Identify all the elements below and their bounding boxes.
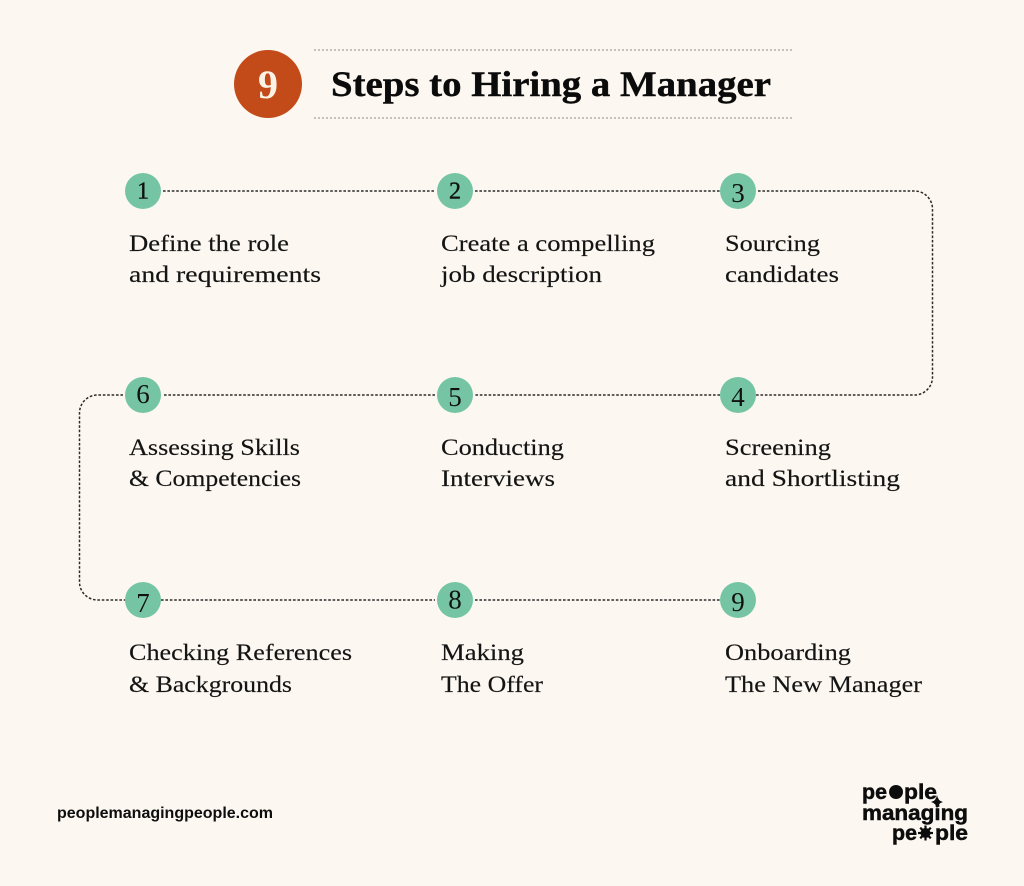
step 8: Making bbox=[441, 640, 524, 666]
website url: peoplemanagingpeople.com bbox=[57, 805, 273, 822]
step 5: Interviews bbox=[441, 466, 555, 492]
step 7: 7 bbox=[136, 588, 150, 618]
step 2: Create a compelling bbox=[441, 231, 655, 257]
step 9: 9 bbox=[731, 587, 745, 617]
step 4: 4 bbox=[731, 382, 745, 412]
step 8: The Offer bbox=[441, 672, 543, 698]
title block bbox=[234, 50, 792, 118]
step 7 bbox=[125, 582, 352, 698]
step 1: Define the role bbox=[129, 231, 289, 257]
step 9: Onboarding bbox=[725, 640, 851, 666]
logo: pe bbox=[892, 821, 917, 845]
step 6: & Competencies bbox=[129, 466, 301, 492]
step 3: candidates bbox=[725, 262, 839, 288]
step 3: Sourcing bbox=[725, 231, 820, 257]
logo: managing bbox=[862, 801, 968, 825]
step 3 bbox=[720, 173, 839, 288]
step 6: 6 bbox=[136, 379, 150, 409]
logo: ple bbox=[935, 821, 968, 845]
step 2: 2 bbox=[449, 178, 461, 204]
step 7: & Backgrounds bbox=[129, 672, 292, 698]
step 8: 8 bbox=[448, 584, 462, 614]
step 5: 5 bbox=[448, 382, 462, 412]
logo: ple bbox=[904, 780, 937, 804]
step 6: Assessing Skills bbox=[129, 435, 300, 461]
step 5: Conducting bbox=[441, 435, 564, 461]
step 3: 3 bbox=[731, 178, 745, 208]
step 1: and requirements bbox=[129, 262, 321, 288]
step 5 bbox=[437, 377, 564, 492]
step 9: The New Manager bbox=[725, 672, 922, 698]
step 4 bbox=[720, 377, 900, 492]
step 8 bbox=[437, 582, 543, 698]
dotted connector path bbox=[80, 191, 932, 600]
title block: 9 bbox=[258, 62, 278, 107]
logo bbox=[862, 780, 968, 845]
step 6 bbox=[125, 377, 301, 492]
step 4: and Shortlisting bbox=[725, 466, 900, 492]
step 7: Checking References bbox=[129, 640, 352, 666]
logo: pe bbox=[862, 780, 887, 804]
step 1: 1 bbox=[137, 178, 149, 204]
title block: Steps to Hiring a Manager bbox=[331, 64, 771, 104]
step 4: Screening bbox=[725, 435, 831, 461]
step 2: job description bbox=[440, 262, 602, 288]
step 2 bbox=[437, 173, 655, 288]
step 9 bbox=[720, 582, 922, 698]
step 1 bbox=[125, 173, 321, 288]
